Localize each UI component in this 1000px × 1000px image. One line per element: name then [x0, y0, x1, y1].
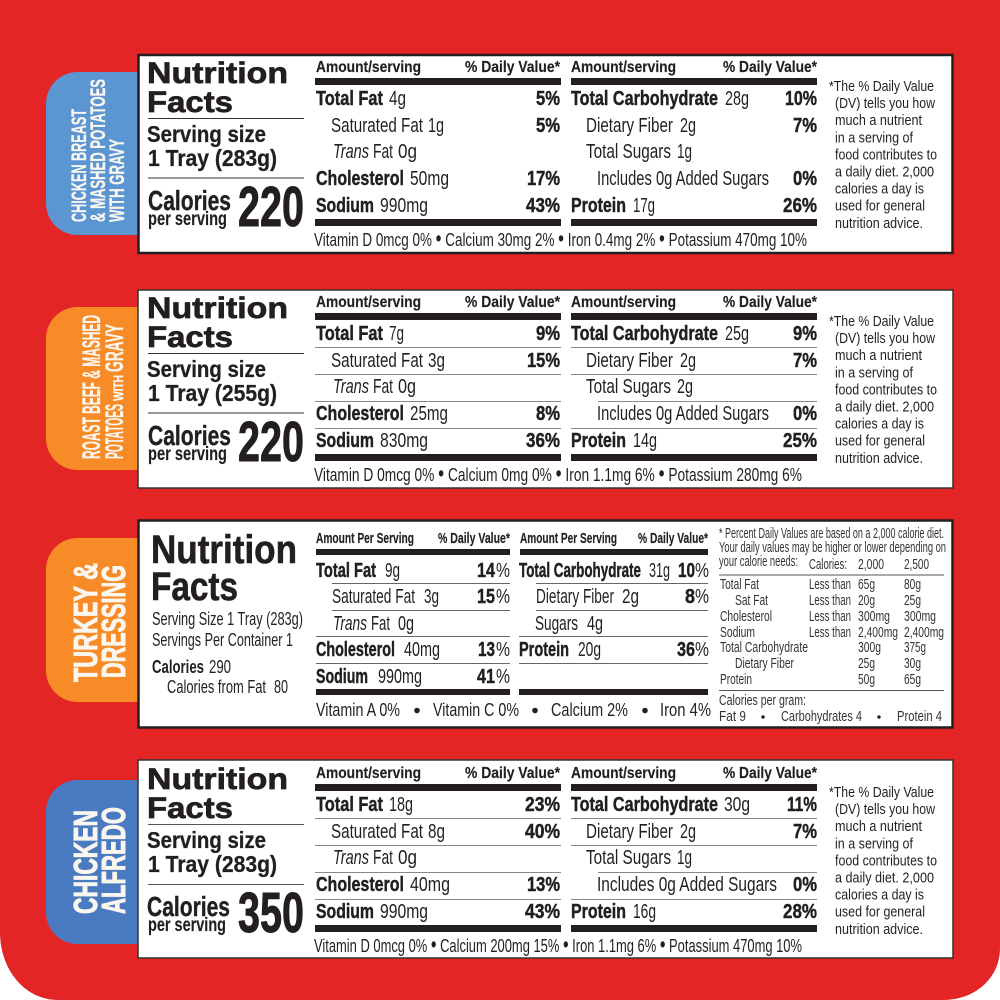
- heading: nutrition facts: [147, 763, 288, 825]
- daily values reference table: 2,400mg: [904, 625, 944, 641]
- panel: roast beef and mashed potatoes: [46, 290, 953, 488]
- nutrient column: carbohydrate, protein: 1g: [677, 847, 692, 869]
- nutrient column: carbohydrate, protein: Total Sugars: [586, 141, 671, 163]
- nutrient column: carbohydrate, protein: [571, 765, 818, 932]
- nutrient column: fats, cholesterol, sodium: Total Fat: [316, 560, 376, 582]
- serving size: [147, 827, 277, 877]
- nutrient column: carbohydrate, protein: 9%: [793, 323, 817, 345]
- nutrient column: carbohydrate, protein: 2g: [680, 115, 696, 137]
- daily values reference table: 65g: [904, 672, 921, 688]
- daily values reference table: Sodium: [720, 625, 755, 641]
- nutrient column: fats, cholesterol, sodium: %: [496, 586, 510, 608]
- vitamins line: Vitamin D 0mcg 0% • Calcium 0mg 0% • Iron 1.1mg 6% • Potassium 280mg 6%: [314, 460, 802, 486]
- tab: turkey and dressing label: TURKEY &: [67, 563, 104, 682]
- daily values reference table: 2,500: [904, 557, 929, 573]
- nutrient column: fats, cholesterol, sodium: Sodium: [316, 430, 374, 452]
- calories: 350: [238, 881, 304, 945]
- nutrient column: carbohydrate, protein: 31g: [649, 560, 670, 582]
- nutrient column: carbohydrate, protein: 7%: [793, 115, 817, 137]
- nutrient column: fats, cholesterol, sodium: 13: [478, 639, 495, 661]
- serving information: [152, 608, 303, 650]
- nutrient column: fats, cholesterol, sodium: % Daily Value*: [465, 294, 561, 311]
- label box: [138, 55, 952, 253]
- nutrient column: carbohydrate, protein: Protein: [571, 430, 626, 452]
- nutrient column: fats, cholesterol, sodium: 17%: [527, 168, 560, 190]
- daily value footnote: calories a day is: [835, 180, 924, 198]
- nutrient column: carbohydrate, protein: Amount/serving: [571, 765, 676, 782]
- nutrient column: fats, cholesterol, sodium: 0g: [398, 847, 417, 869]
- nutrient column: fats, cholesterol, sodium: 990mg: [380, 195, 428, 217]
- nutrient column: carbohydrate, protein: Dietary Fiber: [586, 350, 673, 372]
- nutrient column: carbohydrate, protein: 25g: [725, 323, 749, 345]
- nutrient column: carbohydrate, protein: % Daily Value*: [723, 59, 818, 76]
- heading: nutrition facts: [147, 292, 288, 354]
- daily value footnote: a daily diet. 2,000: [835, 870, 934, 886]
- nutrient column: fats, cholesterol, sodium: Cholesterol: [316, 639, 395, 661]
- nutrient column: carbohydrate, protein: 0%: [793, 874, 817, 896]
- nutrient column: carbohydrate, protein: 14g: [633, 430, 657, 452]
- daily value footnote: calories a day is: [835, 416, 924, 432]
- nutrient column: carbohydrate, protein: 2g: [677, 376, 693, 398]
- daily value footnote: [829, 313, 937, 467]
- nutrient column: fats, cholesterol, sodium: 990mg: [380, 901, 428, 923]
- daily value footnote: much a nutrient: [835, 347, 923, 364]
- nutrient column: carbohydrate, protein: Protein: [571, 195, 626, 217]
- daily values reference table: Sat Fat: [735, 593, 768, 609]
- vitamins line: Vitamin A 0%: [316, 699, 400, 720]
- calories: Calories: [148, 420, 231, 451]
- nutrient column: fats, cholesterol, sodium: 0g: [398, 613, 414, 635]
- nutrient column: fats, cholesterol, sodium: Total Fat: [316, 794, 383, 816]
- nutrient column: carbohydrate, protein: 10%: [785, 88, 817, 110]
- nutrient column: fats, cholesterol, sodium: Fat: [373, 847, 393, 869]
- daily values reference table: Less than: [809, 609, 851, 625]
- nutrient column: fats, cholesterol, sodium: 8%: [536, 403, 560, 425]
- nutrient column: fats, cholesterol, sodium: 15: [477, 586, 495, 608]
- daily value footnote: a daily diet. 2,000: [835, 164, 934, 180]
- nutrient column: carbohydrate, protein: Dietary Fiber: [586, 115, 673, 137]
- tab: roast beef label: [46, 307, 138, 470]
- nutrient column: fats, cholesterol, sodium: 7g: [389, 323, 404, 345]
- calories: 220: [238, 175, 304, 239]
- nutrient column: carbohydrate, protein: 26%: [783, 195, 817, 217]
- nutrient column: fats, cholesterol, sodium: Cholesterol: [316, 403, 404, 425]
- nutrient column: fats, cholesterol, sodium: Amount/serving: [316, 59, 421, 76]
- heading: nutrition facts: Nutrition: [151, 528, 297, 572]
- nutrient column: carbohydrate, protein: %: [695, 560, 709, 582]
- nutrient column: carbohydrate, protein: Total Carbohydrate: [571, 794, 718, 816]
- nutrient column: carbohydrate, protein: Protein: [571, 901, 626, 923]
- tab: roast beef label: POTATOES: [101, 404, 129, 459]
- daily values reference table: Calories:: [809, 557, 847, 573]
- nutrient column: carbohydrate, protein: Total Sugars: [586, 847, 671, 869]
- nutrient column: fats, cholesterol, sodium: Amount Per Serving: [316, 530, 414, 547]
- daily values reference table: Less than: [809, 625, 851, 641]
- nutrient column: carbohydrate, protein: % Daily Value*: [638, 530, 708, 547]
- nutrient column: fats, cholesterol, sodium: Total Fat: [316, 323, 383, 345]
- daily values reference table: Protein 4: [897, 709, 942, 725]
- daily values reference table: Protein: [720, 672, 752, 688]
- nutrient column: fats, cholesterol, sodium: [315, 59, 561, 226]
- nutrient column: fats, cholesterol, sodium: Saturated Fat: [331, 821, 423, 843]
- heading: nutrition facts: [147, 57, 288, 119]
- nutrient column: carbohydrate, protein: 16g: [633, 901, 656, 923]
- vitamins line: Iron 4%: [660, 699, 711, 720]
- nutrient column: carbohydrate, protein: %: [695, 639, 709, 661]
- nutrient column: carbohydrate, protein: 4g: [587, 613, 603, 635]
- daily value footnote: used for general: [835, 198, 925, 214]
- label box: [138, 290, 953, 488]
- calories: per serving: [148, 208, 227, 230]
- nutrient column: carbohydrate, protein: % Daily Value*: [723, 765, 818, 782]
- nutrient column: fats, cholesterol, sodium: 9%: [536, 323, 560, 345]
- calories: Calories: [148, 185, 231, 216]
- tab: roast beef label: ROAST BEEF & MASHED: [78, 315, 106, 459]
- nutrient column: carbohydrate, protein: 2g: [680, 350, 696, 372]
- nutrient column: carbohydrate, protein: Includes 0g Added Sugars: [597, 403, 769, 425]
- tab: chicken breast label: CHICKEN BREAST: [68, 109, 91, 222]
- daily value footnote: (DV) tells you how: [835, 330, 935, 347]
- daily values reference table: 300g: [858, 640, 881, 656]
- nutrient column: fats, cholesterol, sodium: 990mg: [378, 666, 422, 688]
- nutrient column: carbohydrate, protein: 25%: [783, 430, 817, 452]
- nutrient column: fats, cholesterol, sodium: 36%: [526, 430, 560, 452]
- daily value footnote: nutrition advice.: [835, 450, 923, 467]
- label box: [138, 760, 953, 958]
- vitamins line: [316, 699, 711, 720]
- tab: chicken alfredo label: [46, 780, 138, 944]
- tab: turkey and dressing label: [46, 538, 138, 702]
- nutrient column: carbohydrate, protein: 1g: [677, 141, 692, 163]
- daily value footnote: food contributes to: [835, 852, 937, 870]
- nutrient column: fats, cholesterol, sodium: Cholesterol: [316, 168, 404, 190]
- daily values reference table: Dietary Fiber: [735, 656, 794, 672]
- nutrient column: carbohydrate, protein: 2g: [680, 821, 696, 843]
- nutrient column: fats, cholesterol, sodium: 43%: [526, 195, 560, 217]
- tab: chicken alfredo label: ALFREDO: [95, 807, 132, 914]
- serving size: Serving size: [147, 121, 266, 147]
- nutrient column: carbohydrate, protein: Total Sugars: [586, 376, 671, 398]
- nutrient column: fats, cholesterol, sodium: 43%: [525, 901, 560, 923]
- daily value footnote: used for general: [835, 904, 925, 920]
- daily values reference table: Fat 9: [719, 709, 746, 725]
- nutrient column: fats, cholesterol, sodium: [315, 294, 561, 461]
- vitamins line: Vitamin C 0%: [433, 699, 519, 720]
- heading: nutrition facts: Facts: [151, 565, 238, 609]
- calories: 290: [209, 656, 231, 677]
- nutrient column: fats, cholesterol, sodium: 4g: [389, 88, 406, 110]
- heading: nutrition facts: Nutrition: [147, 57, 288, 90]
- serving size: 1 Tray (283g): [148, 851, 277, 877]
- nutrient column: fats, cholesterol, sodium: Saturated Fat: [332, 586, 415, 608]
- nutrient column: carbohydrate, protein: Includes 0g Added Sugars: [597, 874, 777, 896]
- label box: [138, 520, 952, 728]
- daily values reference table: 50g: [858, 672, 875, 688]
- serving information: Servings Per Container 1: [152, 629, 293, 650]
- nutrient column: fats, cholesterol, sodium: 23%: [525, 794, 560, 816]
- panel: chicken alfredo: [46, 760, 953, 958]
- serving size: Serving size: [147, 827, 266, 853]
- daily value footnote: used for general: [835, 432, 925, 450]
- daily value footnote: (DV) tells you how: [835, 801, 935, 818]
- nutrient column: carbohydrate, protein: [571, 59, 818, 226]
- daily values reference table: Calories per gram:: [719, 693, 806, 709]
- tab: roast beef label: GRAVY: [101, 324, 129, 372]
- nutrient column: fats, cholesterol, sodium: 40%: [525, 821, 560, 843]
- daily value footnote: nutrition advice.: [835, 921, 923, 938]
- nutrient column: carbohydrate, protein: 30g: [724, 794, 750, 816]
- nutrient column: fats, cholesterol, sodium: [315, 765, 561, 932]
- nutrient column: fats, cholesterol, sodium: Sodium: [316, 901, 374, 923]
- daily values reference table: 65g: [858, 577, 875, 593]
- nutrient column: fats, cholesterol, sodium: Fat: [371, 613, 390, 635]
- nutrient column: fats, cholesterol, sodium: %: [496, 666, 510, 688]
- nutrient column: carbohydrate, protein: 7%: [793, 350, 817, 372]
- serving size: [147, 356, 277, 406]
- vitamins line: Vitamin D 0mcg 0% • Calcium 200mg 15% • Iron 1.1mg 6% • Potassium 470mg 10%: [314, 931, 802, 957]
- nutrient column: fats, cholesterol, sodium: 9g: [385, 560, 400, 582]
- calories: 80: [274, 676, 288, 697]
- heading: nutrition facts: Facts: [147, 321, 233, 354]
- nutrient column: carbohydrate, protein: 0%: [793, 168, 817, 190]
- daily values reference table: [719, 526, 946, 725]
- nutrient column: fats, cholesterol, sodium: 25mg: [410, 403, 448, 425]
- nutrient column: fats, cholesterol, sodium: 14: [477, 560, 496, 582]
- nutrient column: fats, cholesterol, sodium: 3g: [424, 586, 439, 608]
- heading: nutrition facts: Facts: [147, 792, 233, 825]
- serving size: Serving size: [147, 356, 266, 382]
- serving size: [147, 121, 277, 171]
- heading: nutrition facts: Nutrition: [147, 292, 288, 325]
- nutrient column: fats, cholesterol, sodium: 8g: [428, 821, 445, 843]
- nutrient column: fats, cholesterol, sodium: Fat: [373, 141, 393, 163]
- nutrient column: carbohydrate, protein: Total Carbohydrate: [519, 560, 641, 582]
- vitamins line: Vitamin D 0mcg 0% • Calcium 30mg 2% • Iron 0.4mg 2% • Potassium 470mg 10%: [314, 225, 807, 251]
- daily value footnote: in a serving of: [835, 130, 914, 146]
- nutrient column: carbohydrate, protein: Dietary Fiber: [586, 821, 673, 843]
- serving information: Serving Size 1 Tray (283g): [152, 608, 303, 629]
- nutrient column: fats, cholesterol, sodium: 50mg: [410, 168, 449, 190]
- nutrient column: fats, cholesterol, sodium: 13%: [527, 874, 560, 896]
- serving size: 1 Tray (283g): [148, 145, 277, 171]
- daily value footnote: a daily diet. 2,000: [835, 398, 934, 416]
- nutrient column: carbohydrate, protein: 17g: [633, 195, 655, 217]
- daily value footnote: [829, 78, 937, 232]
- panel: turkey and dressing: [46, 520, 952, 728]
- nutrient column: fats, cholesterol, sodium: 1g: [428, 115, 444, 137]
- daily value footnote: food contributes to: [835, 146, 937, 164]
- daily value footnote: food contributes to: [835, 382, 937, 398]
- nutrient column: fats, cholesterol, sodium: 0g: [398, 376, 416, 398]
- nutrient column: fats, cholesterol, sodium: Trans: [333, 613, 367, 635]
- nutrient column: fats, cholesterol, sodium: % Daily Value*: [438, 530, 510, 547]
- calories: per serving: [148, 443, 227, 465]
- nutrient column: carbohydrate, protein: 11%: [787, 794, 817, 816]
- daily values reference table: your calorie needs:: [719, 554, 798, 570]
- daily values reference table: 20g: [858, 593, 875, 609]
- nutrient column: fats, cholesterol, sodium: Trans: [333, 847, 369, 869]
- nutrient column: fats, cholesterol, sodium: 18g: [389, 794, 413, 816]
- nutrient column: carbohydrate, protein: Amount Per Serving: [520, 530, 617, 547]
- daily value footnote: nutrition advice.: [835, 215, 923, 232]
- nutrient column: carbohydrate, protein: [519, 530, 709, 695]
- daily values reference table: 30g: [904, 656, 921, 672]
- daily value footnote: calories a day is: [835, 886, 924, 904]
- vitamins line: Calcium 2%: [551, 699, 628, 720]
- nutrient column: fats, cholesterol, sodium: % Daily Value*: [465, 59, 561, 76]
- nutrient column: fats, cholesterol, sodium: Amount/serving: [316, 294, 421, 311]
- nutrient column: fats, cholesterol, sodium: Trans: [333, 376, 369, 398]
- serving size: 1 Tray (255g): [148, 380, 277, 406]
- nutrient column: fats, cholesterol, sodium: % Daily Value*: [465, 765, 561, 782]
- nutrient column: carbohydrate, protein: 10: [678, 560, 695, 582]
- nutrient column: carbohydrate, protein: Dietary Fiber: [536, 586, 614, 608]
- tab: turkey and dressing label: DRESSING: [95, 565, 132, 678]
- nutrient column: carbohydrate, protein: Includes 0g Added Sugars: [597, 168, 769, 190]
- calories: [148, 175, 304, 239]
- nutrient column: fats, cholesterol, sodium: Amount/serving: [316, 765, 421, 782]
- tab: roast beef label: WITH: [110, 375, 126, 401]
- daily values reference table: 300mg: [904, 609, 936, 625]
- calories: [147, 881, 304, 945]
- daily values reference table: Total Carbohydrate: [720, 640, 808, 656]
- heading: nutrition facts: Nutrition: [147, 763, 288, 796]
- tab: chicken breast label: WITH GRAVY: [106, 139, 129, 222]
- nutrient column: fats, cholesterol, sodium: Fat: [373, 376, 393, 398]
- daily values reference table: 80g: [904, 577, 921, 593]
- nutrient column: carbohydrate, protein: [571, 294, 818, 461]
- nutrient column: carbohydrate, protein: %: [695, 586, 709, 608]
- daily value footnote: [829, 784, 937, 938]
- nutrient column: carbohydrate, protein: 8: [685, 586, 695, 608]
- nutrient column: carbohydrate, protein: Total Carbohydrate: [571, 88, 718, 110]
- nutrient column: carbohydrate, protein: Amount/serving: [571, 294, 676, 311]
- nutrient column: fats, cholesterol, sodium: 5%: [536, 88, 560, 110]
- nutrient column: fats, cholesterol, sodium: 40mg: [410, 874, 450, 896]
- nutrient column: carbohydrate, protein: Protein: [519, 639, 569, 661]
- nutrient column: carbohydrate, protein: 20g: [578, 639, 601, 661]
- nutrient column: carbohydrate, protein: 28%: [783, 901, 817, 923]
- daily values reference table: 300mg: [858, 609, 890, 625]
- calories: Calories: [147, 891, 230, 922]
- nutrient column: fats, cholesterol, sodium: Saturated Fat: [331, 115, 423, 137]
- nutrient column: fats, cholesterol, sodium: Total Fat: [316, 88, 383, 110]
- nutrient column: fats, cholesterol, sodium: 5%: [536, 115, 560, 137]
- nutrient column: carbohydrate, protein: Total Carbohydrate: [571, 323, 718, 345]
- daily value footnote: much a nutrient: [835, 112, 923, 129]
- daily value footnote: *The % Daily Value: [829, 784, 934, 801]
- daily values reference table: Cholesterol: [720, 609, 772, 625]
- nutrient column: fats, cholesterol, sodium: Cholesterol: [316, 874, 404, 896]
- calories: [152, 656, 288, 697]
- nutrient column: carbohydrate, protein: 2g: [622, 586, 639, 608]
- panel: chicken breast and mashed potatoes: [46, 55, 952, 253]
- daily values reference table: 25g: [858, 656, 875, 672]
- daily value footnote: *The % Daily Value: [829, 313, 934, 330]
- daily values reference table: Total Fat: [720, 577, 759, 593]
- nutrient column: carbohydrate, protein: % Daily Value*: [723, 294, 818, 311]
- nutrient column: fats, cholesterol, sodium: Sodium: [316, 666, 368, 688]
- daily values reference table: Carbohydrates 4: [781, 709, 862, 725]
- nutrient column: carbohydrate, protein: 36: [677, 639, 695, 661]
- nutrient column: fats, cholesterol, sodium: 41: [477, 666, 495, 688]
- daily values reference table: Less than: [809, 593, 851, 609]
- nutrient column: fats, cholesterol, sodium: Trans: [333, 141, 369, 163]
- heading: nutrition facts: [151, 528, 297, 609]
- daily value footnote: (DV) tells you how: [835, 95, 935, 112]
- calories: 220: [238, 410, 304, 474]
- daily value footnote: in a serving of: [835, 836, 914, 852]
- nutrient column: fats, cholesterol, sodium: Sodium: [316, 195, 374, 217]
- daily values reference table: 2,400mg: [858, 625, 898, 641]
- heading: nutrition facts: Facts: [147, 86, 233, 119]
- nutrient column: fats, cholesterol, sodium: 830mg: [380, 430, 428, 452]
- nutrient column: fats, cholesterol, sodium: 0g: [398, 141, 417, 163]
- calories: Calories from Fat: [167, 676, 266, 697]
- nutrient column: carbohydrate, protein: Sugars: [535, 613, 578, 635]
- daily value footnote: much a nutrient: [835, 818, 923, 835]
- nutrient column: carbohydrate, protein: 0%: [793, 403, 817, 425]
- nutrient column: carbohydrate, protein: 28g: [725, 88, 749, 110]
- calories: [148, 410, 304, 474]
- nutrient column: fats, cholesterol, sodium: %: [496, 560, 510, 582]
- nutrient column: carbohydrate, protein: Amount/serving: [571, 59, 676, 76]
- nutrient column: fats, cholesterol, sodium: 15%: [527, 350, 560, 372]
- daily value footnote: in a serving of: [835, 364, 914, 382]
- tab: chicken breast label: [46, 72, 138, 235]
- nutrient column: fats, cholesterol, sodium: 40mg: [404, 639, 440, 661]
- nutrient column: fats, cholesterol, sodium: 3g: [428, 350, 445, 372]
- daily values reference table: 2,000: [858, 557, 884, 573]
- calories: per serving: [148, 914, 226, 936]
- nutrient column: fats, cholesterol, sodium: [316, 530, 510, 695]
- nutrient column: fats, cholesterol, sodium: %: [496, 639, 510, 661]
- calories: Calories: [152, 656, 204, 677]
- nutrient column: fats, cholesterol, sodium: Saturated Fat: [331, 350, 423, 372]
- tab: chicken alfredo label: CHICKEN: [67, 810, 104, 914]
- daily value footnote: *The % Daily Value: [829, 78, 934, 95]
- nutrient column: carbohydrate, protein: 7%: [793, 821, 817, 843]
- daily values reference table: Less than: [809, 577, 851, 593]
- daily values reference table: 375g: [904, 640, 926, 656]
- daily values reference table: 25g: [904, 593, 921, 609]
